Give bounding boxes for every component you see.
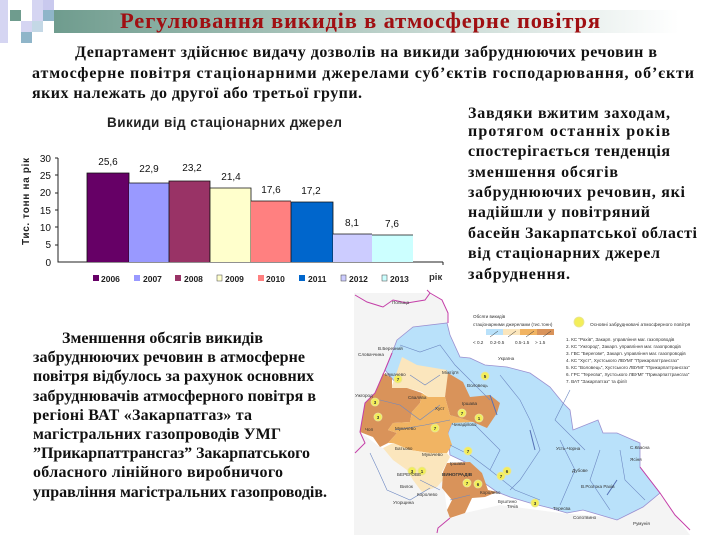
legend: 2006	[101, 274, 120, 284]
map legend: Основні забруднювачі атмосферного повітря	[590, 322, 691, 328]
map place labels: Тячів	[507, 504, 518, 509]
marker numbers: 7	[467, 449, 470, 454]
map place labels: Хуст	[435, 406, 446, 411]
map place labels: Словаччина	[358, 352, 384, 357]
map place labels: Усть-Чорна	[556, 446, 581, 451]
legend: 2010	[266, 274, 285, 284]
y axis labels: 30	[40, 154, 51, 165]
marker numbers: 7	[466, 481, 469, 486]
chart title: Викиди від стаціонарних джерел	[107, 115, 342, 130]
marker numbers: 5	[484, 374, 487, 379]
title band	[54, 10, 679, 33]
right paragraph	[468, 105, 698, 283]
axes	[55, 158, 443, 265]
right paragraph: спостерігається тенденція	[468, 143, 670, 160]
map place labels: Солотвино	[573, 515, 597, 520]
right paragraph: забруднюючих речовин, які	[468, 184, 686, 201]
left paragraph: забруднювачів атмосферного повітря в	[33, 388, 316, 405]
marker numbers: 3	[377, 415, 380, 420]
map place labels: Угорщина	[393, 500, 414, 505]
marker numbers: 6	[506, 469, 509, 474]
map legend: 0.2-0.5	[490, 340, 505, 345]
bar value labels: 22,9	[139, 164, 159, 175]
marker numbers: 7	[500, 474, 503, 479]
map place labels: Батьово	[395, 446, 413, 451]
intro paragraph	[32, 44, 694, 102]
legend: 2013	[390, 274, 409, 284]
orange middle region	[388, 393, 473, 453]
left paragraph: забруднюючих речовин в атмосферне	[33, 349, 305, 366]
map legend: < 0.2	[473, 340, 484, 345]
map legend: 1. КС "Рахів", Закарп. управління маг. газопроводів	[566, 337, 675, 342]
left paragraph: управління магістральних газопроводів.	[33, 484, 327, 501]
right paragraph: протягом останніх років	[468, 123, 670, 140]
map place labels: Дубове	[572, 468, 588, 473]
map place labels: Мукачево	[385, 372, 406, 377]
map place labels: Мукачево	[395, 426, 416, 431]
map place labels: Ужгород	[355, 393, 373, 398]
left paragraph: ”Прикарпаттрансгаз” Закарпатського	[33, 445, 310, 462]
map legend: 0.5-1.5	[515, 340, 530, 345]
map place labels	[355, 300, 650, 526]
map legend: 7. ВАТ "Закарпатгаз" та філії	[566, 379, 628, 384]
right paragraph: зменшення обсягів	[468, 164, 618, 181]
bar value labels: 17,2	[301, 186, 321, 197]
brown west region	[360, 373, 422, 447]
brown south region	[442, 462, 497, 518]
cream north region	[390, 357, 448, 397]
map place labels: В.Розтока Рахів	[581, 484, 615, 489]
intro paragraph: атмосферне повітря стаціонарними джерелами суб’єктів господарювання, об’єкти	[32, 65, 694, 82]
y axis labels: 10	[40, 223, 51, 234]
x axis title: рік	[429, 272, 442, 283]
map place labels: Чоп	[365, 427, 374, 432]
right paragraph: від стаціонарних джерел	[468, 245, 660, 262]
state border	[355, 290, 690, 533]
left paragraph: Зменшення обсягів викидів	[62, 330, 263, 347]
map place labels: Іршава	[450, 461, 465, 466]
map place labels: БЕРЕГОВЕ	[397, 472, 421, 477]
bar value labels: 25,6	[98, 157, 118, 168]
title: Регулювання викидів в атмосферне повітря	[120, 8, 600, 33]
marker numbers: 1	[478, 416, 481, 421]
left paragraph: обласного лінійного виробничого	[33, 464, 283, 481]
y axis labels: 0	[45, 258, 51, 269]
map place labels: Королево	[480, 490, 501, 495]
bar value labels: 21,4	[221, 172, 241, 183]
map legend: стаціонарними джерелами (тис.тонн)	[473, 322, 553, 327]
map place labels: Тересва	[553, 506, 571, 511]
legend: 2009	[225, 274, 244, 284]
map place labels: Вилок	[400, 484, 414, 489]
right paragraph: Завдяки вжитим заходам,	[468, 105, 670, 122]
bar value labels: 23,2	[182, 163, 202, 174]
map place labels: Ясіня	[630, 457, 642, 462]
map place labels: Королево	[417, 492, 438, 497]
marker numbers	[374, 374, 537, 506]
map place labels: Чинадійово	[452, 421, 477, 427]
map legend: > 1.5	[535, 340, 546, 345]
decorative corner squares	[0, 0, 54, 43]
map place labels: Румунія	[633, 521, 650, 526]
bar value labels: 17,6	[261, 185, 281, 196]
map place labels: Міжгір'я	[442, 370, 459, 375]
map place labels: ВИНОГРАДІВ	[442, 472, 473, 477]
bars	[87, 173, 413, 262]
map legend: 3. ГВС "Берегове", Закарп. управління маг. газопроводів	[566, 351, 686, 356]
legend: 2011	[308, 274, 327, 284]
right paragraph: забруднення.	[468, 266, 570, 283]
map legend: Обсяги викидів	[473, 314, 506, 319]
map of Zakarpattia	[354, 290, 691, 535]
map place labels: Буштино	[498, 499, 517, 504]
y axis title: Тис. тонн на рік	[21, 157, 32, 245]
intro paragraph: яких належать до другої або третьої групи.	[32, 85, 362, 102]
legend: 2008	[184, 274, 203, 284]
map place labels: Україна	[498, 356, 515, 361]
marker numbers: 7	[461, 411, 464, 416]
map place labels: В.Березний	[378, 345, 403, 351]
marker numbers: 3	[534, 501, 537, 506]
neighbouring territory	[354, 293, 690, 535]
map place labels: Мукачево	[422, 452, 443, 457]
map legend: 6. ГРС "Тересва", Хустського ЛВУМГ "Прикарпаттрансгаз"	[566, 372, 690, 377]
blue low-emission region	[385, 323, 660, 520]
intro paragraph: Департамент здійснює видачу дозволів на викиди забруднюючих речовин в	[75, 44, 657, 61]
y axis labels: 20	[40, 188, 51, 199]
map legend: 5. КС "Воловець", Хустського ЛВУМГ "Прикарпаттрансгаз"	[566, 365, 690, 370]
y axis labels: 5	[45, 240, 51, 251]
bar chart	[21, 115, 443, 284]
legend	[93, 274, 409, 284]
marker numbers: 7	[434, 426, 437, 431]
marker numbers: 3	[411, 469, 414, 474]
marker numbers: 7	[397, 377, 400, 382]
brown east region	[445, 373, 500, 428]
marker numbers: 1	[421, 469, 424, 474]
left paragraph: повітря відбулось за рахунок основних	[33, 368, 314, 385]
right paragraph: надійшли у повітряний	[468, 204, 650, 221]
left paragraph: регіоні ВАТ «Закарпатгаз» та	[33, 407, 252, 424]
y axis labels: 25	[40, 171, 51, 182]
legend: 2007	[143, 274, 162, 284]
map legend: 2. КС "Ужгород", Закарп. управління маг. газопроводів	[566, 344, 681, 349]
map place labels: Іршава	[462, 401, 477, 406]
left paragraph	[33, 330, 327, 501]
bar value labels	[98, 157, 399, 230]
y axis labels	[40, 154, 51, 269]
bar value labels: 7,6	[385, 219, 399, 230]
cream south region	[383, 443, 450, 492]
y axis labels: 15	[40, 206, 51, 217]
map place labels: Свалява	[408, 395, 427, 400]
map legend: 4. КС "Хуст", Хустського ЛВУМГ "Прикарпаттрансгаз"	[566, 358, 679, 363]
marker numbers: 6	[477, 482, 480, 487]
right paragraph: басейн Закарпатської області	[468, 225, 698, 242]
map legend	[473, 314, 691, 384]
marker numbers: 3	[374, 400, 377, 405]
emission source markers	[371, 372, 539, 507]
map place labels: Польща	[392, 300, 410, 305]
legend: 2012	[349, 274, 368, 284]
bar value labels: 8,1	[345, 218, 359, 229]
map place labels: Воловець	[467, 383, 488, 388]
left paragraph: магістральних газопроводів УМГ	[33, 426, 281, 443]
map place labels: С.Квасна	[630, 445, 650, 450]
rivers	[370, 345, 645, 510]
